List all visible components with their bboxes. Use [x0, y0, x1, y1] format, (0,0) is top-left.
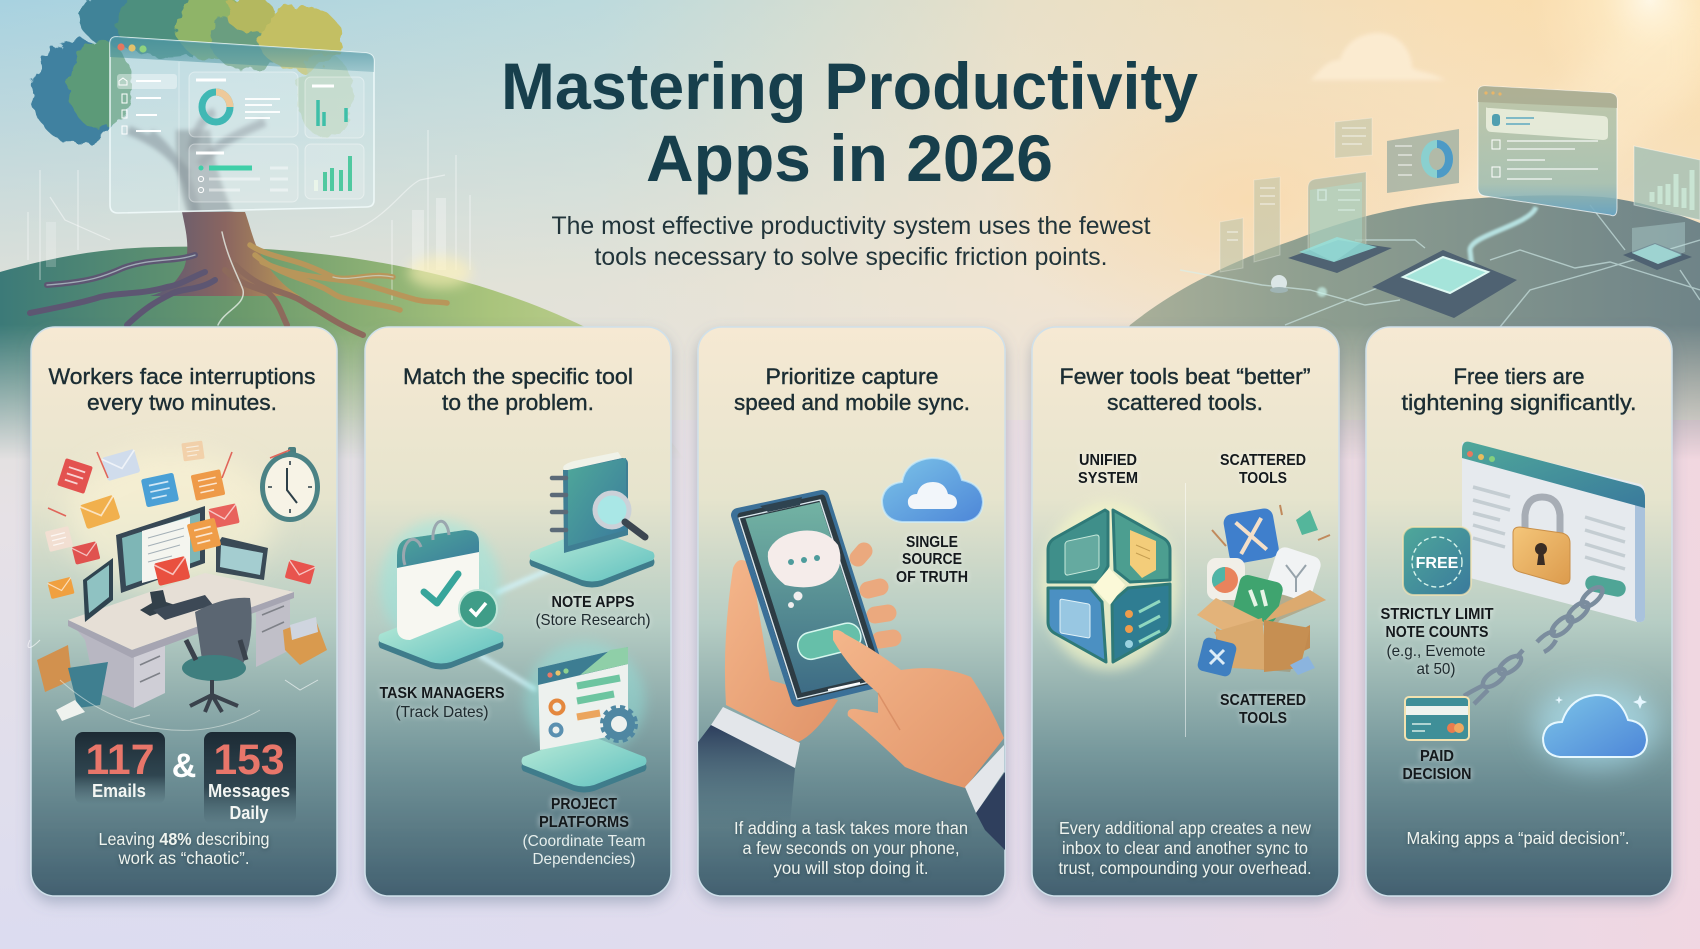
card background	[1032, 327, 1339, 896]
green tile	[1232, 573, 1284, 625]
body text: work as “chaotic”.	[118, 848, 249, 868]
illustration: tree on hill with glass dashboard	[0, 0, 700, 480]
icon: free badge: FREE	[1416, 555, 1459, 572]
illustration: digital globe with floating panels	[1040, 33, 1700, 480]
label: scattered tools bottom: SCATTERED	[1220, 692, 1306, 709]
small tiles	[1196, 636, 1238, 678]
stat: 117 emails: 117	[86, 736, 154, 784]
panel: fewer tools	[1032, 327, 1339, 896]
tree roots	[30, 232, 447, 335]
dashboard bar panel top	[305, 77, 364, 138]
left sleeve	[698, 725, 795, 830]
label: coordinate team: Dependencies)	[532, 851, 636, 868]
label: strictly limit	[1380, 606, 1494, 678]
dashboard progress panel	[189, 144, 298, 202]
icon: project window on platform	[522, 642, 646, 792]
cloud behind panels	[1310, 33, 1446, 80]
phone	[738, 497, 880, 700]
body text: Making apps a “paid decision”.	[1406, 828, 1630, 848]
heading: Workers face interruptions	[48, 364, 316, 389]
glowing platforms	[1270, 182, 1692, 318]
title: Mastering Productivity	[501, 49, 1198, 123]
body text: Leaving 48% describing	[98, 829, 270, 849]
body text: trust, compounding your overhead.	[1058, 858, 1312, 878]
label: coordinate team: (Coordinate Team	[522, 833, 646, 850]
left hand	[725, 551, 893, 742]
capture button	[797, 622, 862, 660]
heading: Free tiers are	[1454, 364, 1584, 389]
icon: free badge	[1403, 527, 1471, 595]
heading: to the problem.	[442, 390, 594, 415]
label: project platforms: PROJECT	[551, 796, 617, 813]
label: unified system: SYSTEM	[1078, 470, 1138, 487]
left cuff	[711, 707, 800, 768]
label: paid decision	[1402, 748, 1472, 783]
body text: Every additional app creates a new	[1059, 818, 1311, 838]
label: strictly limit: STRICTLY LIMIT	[1380, 606, 1494, 623]
subtitle: The most effective productivity system uses the fewest	[552, 212, 1151, 240]
label: scattered tools bottom	[1220, 692, 1306, 727]
globe surface	[1129, 196, 1700, 452]
body text: you will stop doing it.	[774, 858, 928, 878]
card background	[698, 327, 1005, 896]
icon: notebook on platform	[530, 452, 654, 588]
panel: interruptions	[28, 327, 337, 896]
card background	[365, 327, 671, 896]
heading	[48, 364, 316, 415]
monitors	[83, 506, 268, 622]
body text: If adding a task takes more than	[734, 818, 968, 838]
heading: Fewer tools beat “better”	[1060, 364, 1310, 389]
icon: glowing cloud	[1534, 684, 1658, 768]
title: Apps in 2026	[646, 121, 1053, 195]
subtitle	[552, 212, 1151, 271]
heading	[734, 364, 970, 415]
heading: Prioritize capture	[766, 364, 938, 389]
label: single source of truth: OF TRUTH	[896, 569, 968, 586]
boxes and folders	[28, 617, 327, 730]
label: scattered tools bottom: TOOLS	[1239, 710, 1287, 727]
title	[501, 49, 1198, 195]
heading: every two minutes.	[87, 390, 277, 415]
label: single source of truth: SOURCE	[902, 551, 962, 568]
glowing data stream	[1470, 207, 1536, 274]
tree canopy	[32, 0, 353, 144]
body text	[734, 818, 968, 878]
label: unified system	[1078, 452, 1138, 487]
body text	[1058, 818, 1312, 878]
label: strictly limit: at 50)	[1416, 661, 1456, 678]
card background	[31, 327, 337, 896]
panel: free tiers	[1366, 327, 1672, 896]
icon: credit card	[1405, 697, 1469, 740]
label: paid decision: PAID	[1420, 748, 1454, 765]
dashboard bar panel bottom	[305, 144, 364, 199]
glass dashboard window	[110, 37, 374, 213]
label: coordinate team	[522, 833, 646, 868]
icon: scattered tools in box	[1196, 505, 1330, 678]
icon: padlock	[1513, 497, 1570, 584]
dashboard donut panel	[189, 72, 298, 137]
stat: 153 messages	[204, 732, 296, 824]
label: note apps: (Store Research)	[536, 612, 650, 629]
right chart panel	[1634, 146, 1700, 220]
thought bubble	[768, 531, 840, 608]
desk	[68, 573, 294, 708]
dashboard sidebar	[117, 74, 177, 134]
label: note apps: NOTE APPS	[552, 594, 634, 611]
stat: 153 messages: Daily	[230, 803, 268, 823]
label: scattered tools top: TOOLS	[1239, 470, 1287, 487]
icon: locked window	[1462, 442, 1645, 622]
floating data sheets	[1220, 118, 1372, 272]
heading: speed and mobile sync.	[734, 390, 970, 415]
hill	[0, 246, 584, 454]
blue app tile	[1222, 507, 1280, 565]
circuit lines	[1180, 205, 1700, 327]
ampersand: &	[172, 747, 196, 785]
card background	[1366, 327, 1672, 896]
label: unified system: UNIFIED	[1079, 452, 1137, 469]
heading	[403, 364, 633, 415]
white and pie tiles	[1265, 545, 1323, 603]
stat: 153 messages: 153	[214, 736, 284, 784]
body text	[98, 829, 270, 868]
label: strictly limit: (e.g., Evemote	[1386, 643, 1486, 660]
illustration: hands with phone	[698, 497, 1005, 850]
label: task managers: TASK MANAGERS	[380, 685, 504, 702]
label: project platforms	[539, 796, 629, 831]
icon: broken chain	[1464, 584, 1606, 704]
donut panel	[1387, 129, 1459, 193]
panel: match tool	[365, 327, 671, 896]
large security panel	[1478, 86, 1617, 216]
tree trunk behind glass	[128, 112, 265, 215]
subtitle: tools necessary to solve specific friction points.	[594, 243, 1108, 271]
icon: calendar on platform	[378, 520, 504, 670]
right cuff and sleeve	[965, 745, 1004, 813]
label: single source of truth: SINGLE	[906, 534, 958, 551]
background data lines	[28, 130, 470, 300]
icon: stopwatch	[260, 447, 320, 522]
label: single source of truth	[896, 534, 968, 586]
heading: tightening significantly.	[1402, 390, 1636, 415]
label: task managers	[380, 685, 504, 721]
body text: a few seconds on your phone,	[742, 838, 960, 858]
flying envelopes and notes	[45, 441, 315, 599]
label: scattered tools top: SCATTERED	[1220, 452, 1306, 469]
stat: 117 emails	[75, 732, 165, 804]
connectors	[479, 568, 553, 690]
stat: 153 messages: Messages	[208, 781, 290, 801]
label: strictly limit: NOTE COUNTS	[1386, 624, 1488, 641]
label: paid decision: DECISION	[1402, 766, 1472, 783]
stat: 117 emails: Emails	[92, 781, 146, 801]
body text: inbox to clear and another sync to	[1062, 838, 1308, 858]
panel: capture speed	[698, 327, 1005, 896]
label: project platforms: PLATFORMS	[539, 814, 629, 831]
heading	[1402, 364, 1636, 415]
label: task managers: (Track Dates)	[396, 704, 488, 721]
heading	[1060, 364, 1310, 415]
heading: scattered tools.	[1107, 390, 1263, 415]
box flaps	[1197, 598, 1264, 640]
illustration: chaotic desk	[28, 441, 327, 730]
icon: unified puzzle hexagon	[1041, 502, 1177, 670]
heading: Match the specific tool	[403, 364, 633, 389]
label: scattered tools top	[1220, 452, 1306, 487]
chair	[182, 598, 252, 712]
label: note apps	[536, 594, 650, 629]
right hand	[833, 630, 1004, 788]
tree trunk	[150, 212, 300, 296]
icon: sync cloud	[882, 458, 983, 522]
